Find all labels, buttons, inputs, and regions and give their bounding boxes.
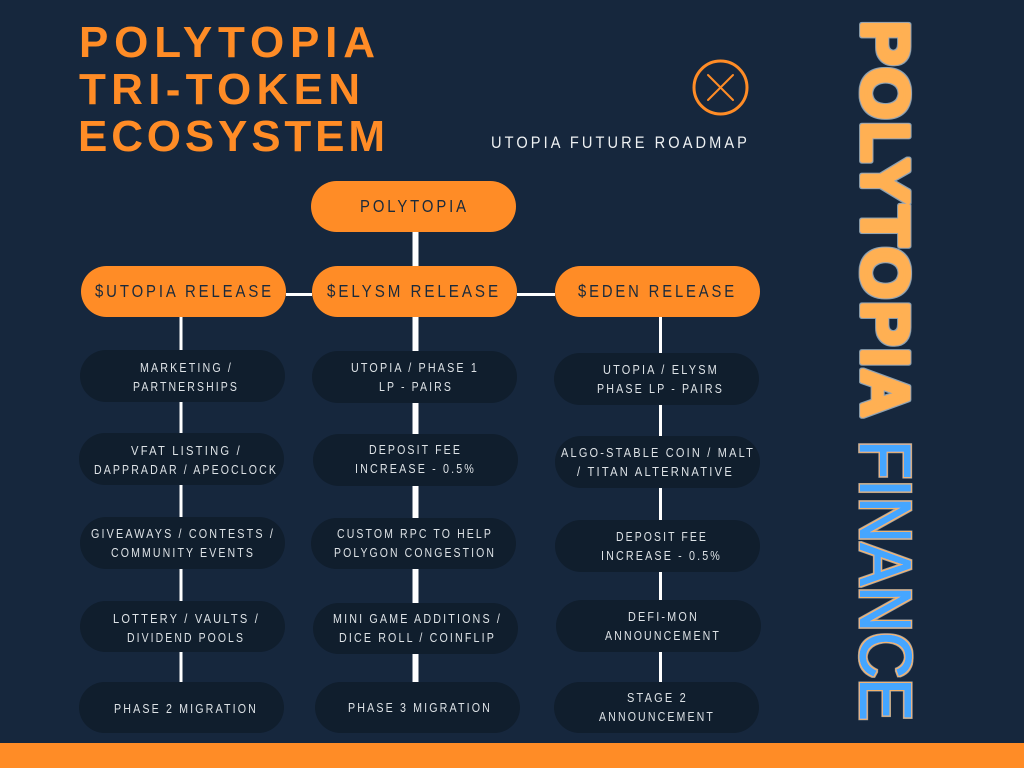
step: defi-mon	[556, 600, 761, 652]
step: phase LP: UTOPIA / ELYSM	[603, 363, 719, 377]
subtitle: UTOPIA FUTURE ROADMAP	[491, 133, 750, 152]
title	[78, 18, 385, 161]
step: marketing: PARTNERSHIPS	[133, 380, 239, 394]
title: ECOSYSTEM	[78, 112, 385, 161]
step: marketing	[80, 350, 285, 402]
title: TRI-TOKEN	[79, 65, 360, 114]
step: custom RPC: CUSTOM RPC TO HELP	[337, 527, 493, 541]
step: custom RPC: POLYGON CONGESTION	[334, 546, 496, 560]
step: deposit fee: INCREASE - 0.5%	[355, 462, 476, 476]
node: $ELYSM release	[312, 266, 517, 317]
column: $UTOPIA steps	[79, 350, 285, 733]
connectors	[180, 232, 662, 682]
node: $EDEN release	[555, 266, 760, 317]
step: lottery: DIVIDEND POOLS	[127, 631, 245, 645]
step: mini games: DICE ROLL / COINFLIP	[339, 631, 496, 645]
step: custom RPC	[311, 518, 516, 569]
step: mini games	[313, 603, 518, 654]
step: stage 2: STAGE 2	[627, 691, 688, 705]
title: POLYTOPIA	[79, 18, 375, 67]
vertical wordmark: Polytopia: POLYTOPIA	[849, 21, 923, 417]
step: deposit fee: DEPOSIT FEE	[616, 530, 708, 544]
column: $EDEN steps	[554, 353, 761, 733]
step: phase 2 migration	[79, 682, 284, 733]
column: $ELYSM steps	[311, 351, 520, 733]
step: marketing: MARKETING /	[140, 361, 233, 375]
step: listings	[79, 433, 284, 485]
icon: circled X logo	[694, 61, 747, 114]
step: deposit fee	[313, 434, 518, 486]
step: phase 1 LP: LP - PAIRS	[379, 380, 453, 394]
node: $ELYSM release: $ELYSM RELEASE	[327, 281, 501, 301]
step: stage 2	[554, 682, 759, 733]
step: deposit fee: DEPOSIT FEE	[369, 443, 462, 457]
step: giveaways	[80, 517, 285, 569]
step: algo-stable coin: ALGO-STABLE COIN / MALT	[561, 446, 755, 460]
step: defi-mon: ANNOUNCEMENT	[605, 629, 721, 643]
step: algo-stable coin: / TITAN ALTERNATIVE	[577, 465, 734, 479]
step: listings: DAPPRADAR / APEOCLOCK	[94, 463, 278, 477]
step: phase 1 LP	[312, 351, 517, 403]
step: phase 3 migration: PHASE 3 MIGRATION	[348, 701, 492, 715]
step: mini games: MINI GAME ADDITIONS /	[333, 612, 502, 626]
step: listings: VFAT LISTING /	[131, 444, 242, 458]
step: lottery	[80, 601, 285, 652]
vertical wordmark: Finance: FINANCE	[844, 440, 924, 721]
step: giveaways: COMMUNITY EVENTS	[111, 546, 255, 560]
step: phase 2 migration: PHASE 2 MIGRATION	[114, 702, 258, 716]
step: phase LP: PHASE LP - PAIRS	[597, 382, 724, 396]
step: giveaways: GIVEAWAYS / CONTESTS /	[91, 527, 275, 541]
root node: Polytopia	[311, 181, 516, 232]
step: defi-mon: DEFI-MON	[628, 610, 699, 624]
step: phase LP	[554, 353, 759, 405]
node: $UTOPIA release: $UTOPIA RELEASE	[95, 281, 274, 301]
step: stage 2: ANNOUNCEMENT	[599, 710, 715, 724]
step: phase 1 LP: UTOPIA / PHASE 1	[351, 361, 479, 375]
node: $EDEN release: $EDEN RELEASE	[578, 281, 737, 301]
step: phase 3 migration	[315, 682, 520, 733]
step: deposit fee: INCREASE - 0.5%	[601, 549, 722, 563]
node: $UTOPIA release	[81, 266, 286, 317]
step: deposit fee	[555, 520, 760, 572]
footer bar	[0, 743, 1024, 768]
step: algo-stable coin	[555, 436, 760, 488]
step: lottery: LOTTERY / VAULTS /	[113, 612, 260, 626]
root node: Polytopia: POLYTOPIA	[360, 196, 469, 216]
